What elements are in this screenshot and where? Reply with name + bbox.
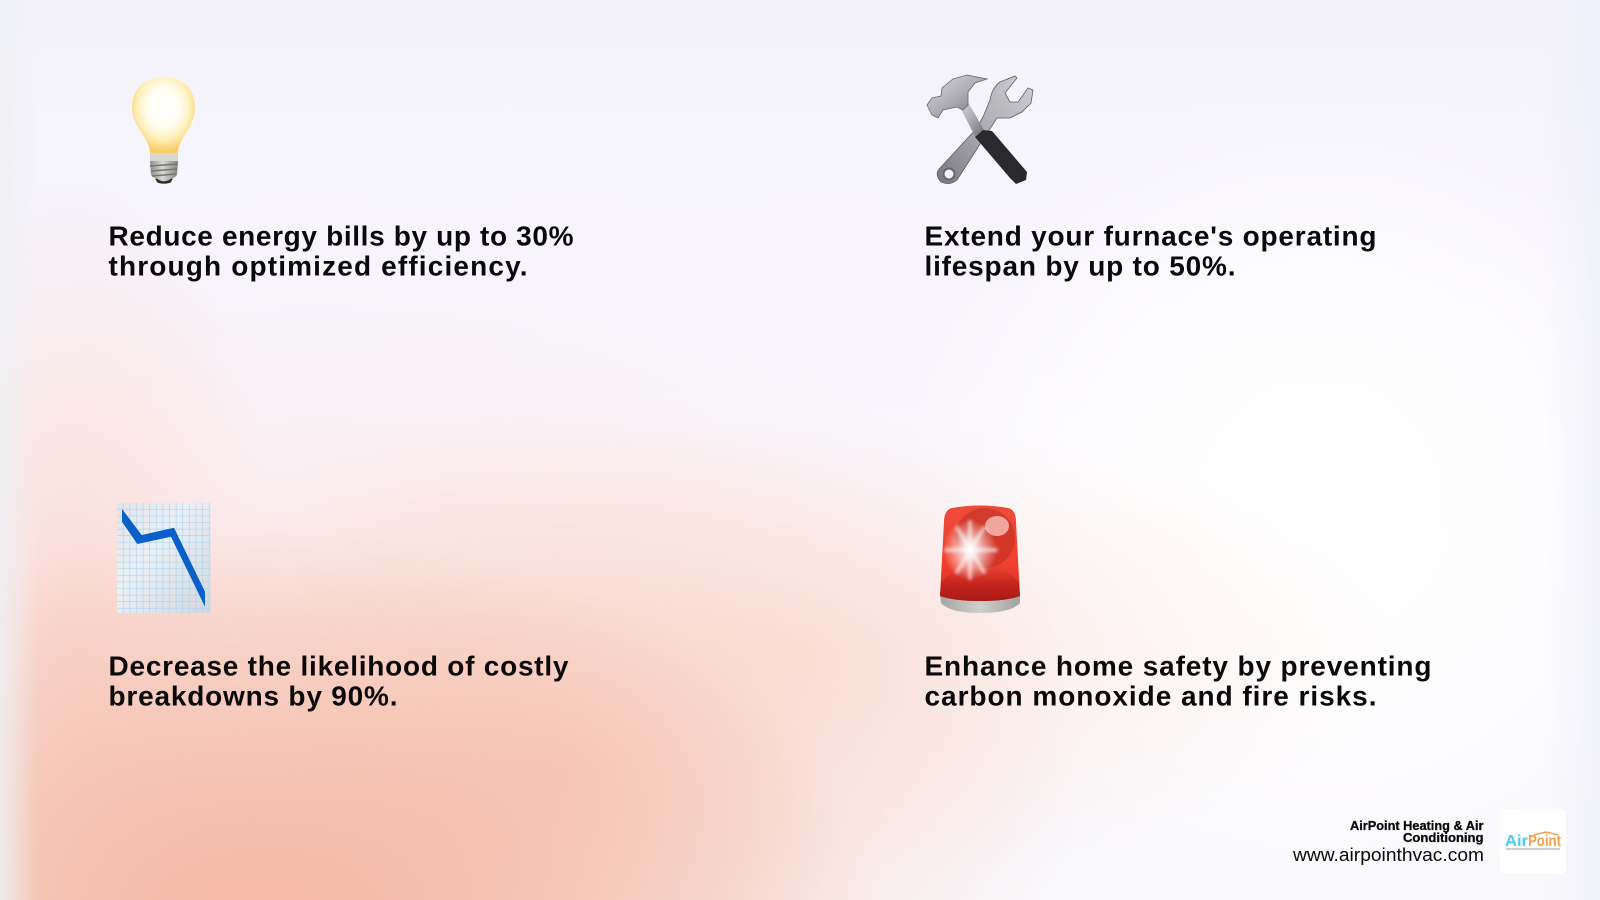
text: enhance safety (924, 650, 1432, 712)
panel: extend lifespan (924, 75, 1376, 282)
company name (1350, 818, 1484, 845)
panel: enhance safety (924, 506, 1432, 712)
icon: light bulb (132, 77, 195, 183)
icon: red siren (940, 506, 1020, 613)
company name: Conditioning (1403, 830, 1484, 845)
panel: reduce energy bills (108, 77, 574, 282)
text: enhance safety: carbon monoxide and fire risks. (924, 680, 1376, 712)
text: decrease breakdowns: Decrease the likelihood of costly (108, 650, 569, 682)
text: decrease breakdowns (108, 650, 569, 712)
logo: Point (1528, 833, 1562, 850)
company name: AirPoint Heating & Air (1350, 818, 1484, 833)
panel: decrease breakdowns (108, 503, 569, 712)
text: reduce energy bills: through optimized efficiency. (108, 250, 528, 282)
icon: declining chart (117, 503, 210, 613)
logo: Air (1505, 833, 1528, 850)
text: extend lifespan (924, 220, 1376, 282)
website url: www.airpointhvac.com (1292, 845, 1484, 865)
icon: hammer and wrench (927, 75, 1033, 184)
text: enhance safety: Enhance home safety by preventing (924, 650, 1432, 682)
text: extend lifespan: lifespan by up to 50%. (924, 250, 1236, 282)
text: extend lifespan: Extend your furnace's operating (924, 220, 1376, 252)
branding footer (1292, 809, 1566, 874)
text: reduce energy bills: Reduce energy bills by up to 30% (108, 220, 574, 252)
text: reduce energy bills (108, 220, 574, 282)
logo (1500, 809, 1566, 874)
text: decrease breakdowns: breakdowns by 90%. (108, 680, 398, 712)
